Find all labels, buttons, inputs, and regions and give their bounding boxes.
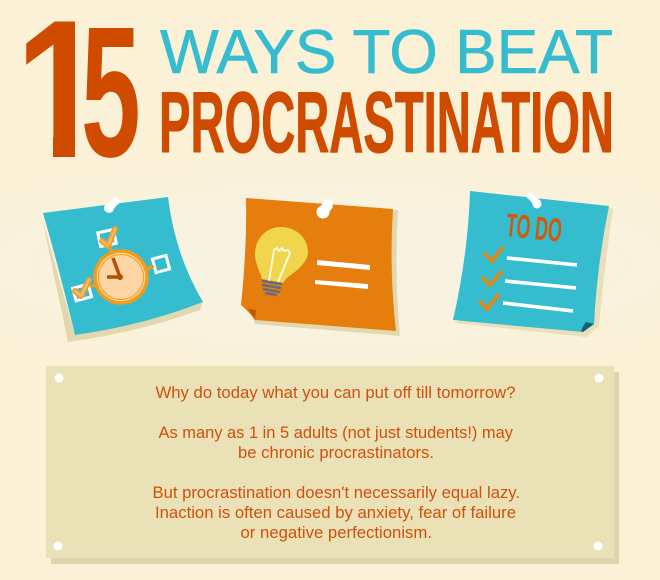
panel pins [54,374,604,550]
fold corner [581,322,594,332]
heading: to do: TO DO [504,206,564,249]
intro text [152,384,520,542]
intro text: or negative perfectionism. [240,524,432,542]
intro text: As many as 1 in 5 adults (not just students!) may [158,424,514,442]
icon: clock [90,245,154,303]
icon: right checkbox [152,255,170,273]
checklist lines [503,258,577,311]
icon: pin [526,192,542,208]
title line: ways to beat: WAYS TO BEAT [160,18,613,87]
intro panel [46,366,619,564]
icon: light bulb [255,227,308,295]
icon: top checkbox [98,229,116,247]
intro text: be chronic procrastinators. [238,444,434,462]
title number 15 [26,22,138,158]
icon: pin [316,199,333,218]
icon: left checkbox [73,280,92,301]
intro text: But procrastination doesn't necessarily equal lazy. [152,484,520,502]
icon: pin [104,197,120,213]
title [26,22,612,158]
sticky note: light bulb idea [241,198,400,336]
checklist marks [480,247,503,309]
fold corner [248,309,256,319]
intro text: Inaction is often caused by anxiety, fear of failure [155,504,516,522]
intro text: Why do today what you can put off till tomorrow? [156,384,516,402]
sticky note: to do list [453,191,613,337]
sticky note: clock and checkboxes [42,197,203,342]
text lines [315,260,370,289]
